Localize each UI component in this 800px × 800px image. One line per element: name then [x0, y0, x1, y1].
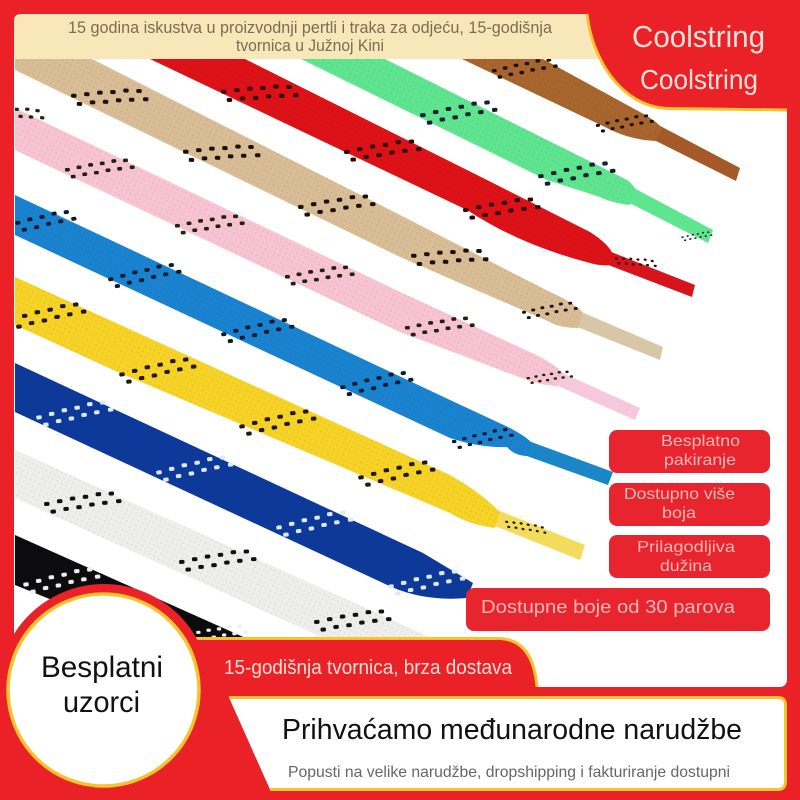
- badge text: Besplatni: [41, 651, 163, 684]
- top banner: [14, 14, 600, 59]
- ribbon text: 15-godišnja tvornica, brza dostava: [224, 657, 513, 679]
- tag: custom length: dužina: [660, 558, 712, 575]
- tag: 30 pairs: Dostupne boje od 30 parova: [481, 597, 736, 617]
- brand name secondary: Coolstring: [640, 64, 758, 95]
- free samples badge: [0, 584, 210, 800]
- tag: custom length: Prilagodljiva: [637, 539, 735, 556]
- product photo: shoelaces: [0, 58, 740, 660]
- banner text: [68, 19, 553, 55]
- panel subtext: Popusti na velike narudžbe, dropshipping i fakturiranje dostupni: [288, 764, 730, 781]
- brand corner: [587, 0, 787, 110]
- lace: black: [15, 535, 248, 638]
- lace: pink: [0, 102, 640, 420]
- factory ribbon: [190, 638, 538, 700]
- lace: green: [301, 59, 713, 243]
- tag: free packaging: Besplatno: [661, 433, 740, 450]
- brand name: Coolstring: [632, 19, 765, 54]
- lace: navy: [15, 363, 473, 599]
- banner text: tvornica u Južnoj Kini: [236, 37, 384, 55]
- international orders panel: [229, 698, 786, 790]
- tag: more colours: [609, 483, 770, 526]
- tag: more colours: Dostupno više: [624, 486, 735, 503]
- tag: free packaging: pakiranje: [664, 452, 736, 469]
- badge text: [41, 651, 163, 719]
- lace: brown: [462, 58, 740, 181]
- tag: more colours: boja: [662, 505, 696, 522]
- lace: yellow: [8, 277, 585, 560]
- bottom red fill: [0, 687, 800, 800]
- tag: free packaging: [609, 430, 770, 473]
- lace: blue: [2, 195, 613, 485]
- badge text: uzorci: [63, 686, 140, 719]
- banner text: 15 godina iskustva u proizvodnji pertli i traka za odjeću, 15-godišnja: [68, 19, 553, 37]
- panel heading: Prihvaćamo međunarodne narudžbe: [282, 714, 742, 746]
- tag: custom length: [609, 535, 770, 578]
- lace: red: [150, 59, 695, 297]
- tag: 30 pairs: [466, 588, 770, 631]
- lace: white: [15, 450, 440, 650]
- lace: tan: [15, 59, 663, 360]
